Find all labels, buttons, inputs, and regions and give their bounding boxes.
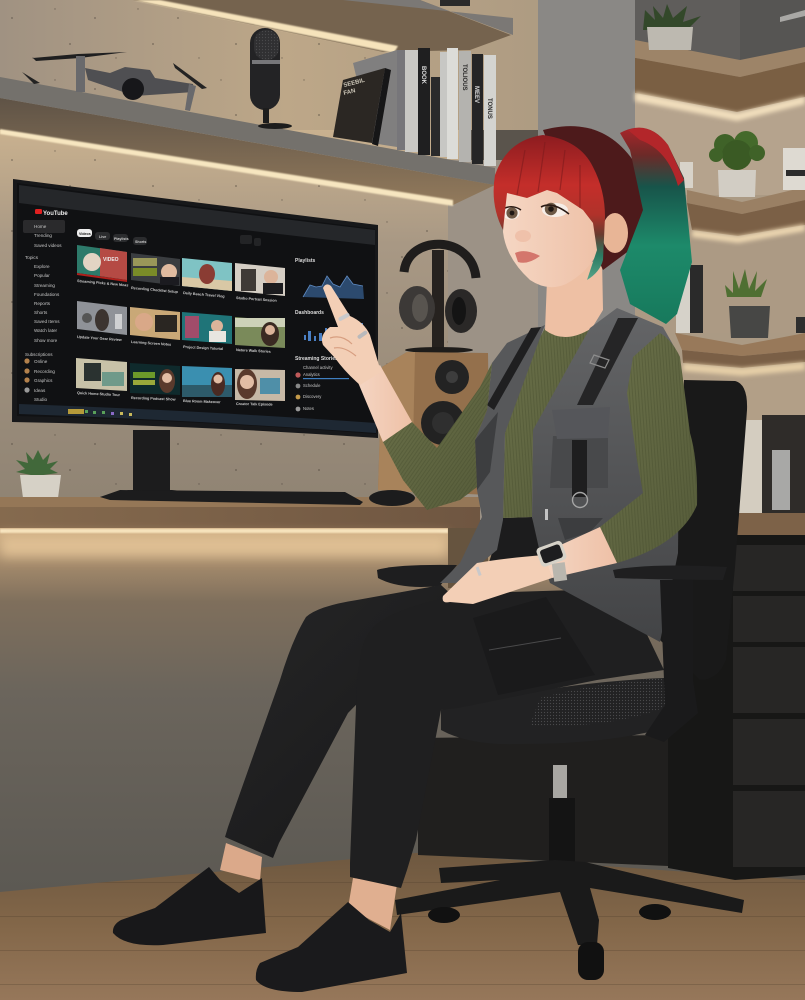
under-desk drawer unit: [418, 735, 670, 866]
wooden speaker: [378, 352, 490, 495]
ear: [602, 213, 628, 253]
shelf items behind chair: [737, 415, 805, 513]
vest: [440, 308, 680, 642]
main wall shelf: [0, 77, 495, 206]
sidebar menu: Saved Items: [34, 319, 60, 324]
sidebar menu: Explore: [34, 264, 50, 269]
chest pocket left: [475, 412, 498, 490]
vest right panel: [532, 308, 680, 642]
lower vest pocket: [558, 518, 603, 540]
sidebar menu: Home: [34, 224, 47, 229]
sidebar menu: Popular: [34, 273, 50, 278]
monitor stand: [100, 430, 240, 497]
dashboards bar chart: Dashboards: [295, 310, 324, 316]
near shoe: [256, 902, 407, 992]
torso sweater: [503, 326, 592, 518]
sidebar menu: Graphics: [34, 378, 53, 383]
ponytail: [620, 128, 692, 324]
video titles: Recording Podcast Show: [131, 396, 176, 402]
video titles: Daily Beach Travel Vlog: [183, 291, 225, 299]
sidebar menu: Studio: [34, 397, 47, 402]
far leg: [225, 585, 500, 858]
far shoe: [113, 867, 266, 945]
video titles: Learning Screen Notes: [131, 340, 171, 347]
desk: [0, 497, 805, 535]
sidebar menu: Subscriptions: [25, 352, 53, 357]
sidebar menu: Trending: [34, 233, 52, 238]
sidebar menu: Watch later: [34, 328, 58, 333]
filter chips: [77, 229, 261, 246]
sidebar menu: [23, 220, 65, 402]
streaming list: Schedule: [303, 383, 321, 388]
back wall: concrete pillar: [448, 0, 635, 520]
streaming list: Streaming Stories: [295, 356, 338, 362]
browser chrome: [19, 185, 375, 245]
books on main shelf: BOOK: [420, 66, 426, 85]
neck: [545, 258, 603, 337]
drone: [22, 52, 207, 111]
back wall: right alcove: [635, 0, 805, 520]
monitor screen: [17, 183, 376, 434]
sidebar menu: Show more: [34, 338, 58, 343]
left sleeve: [383, 363, 492, 510]
chair: [395, 380, 747, 980]
video titles: Quick Home Studio Tour: [77, 391, 121, 397]
back hair: [543, 126, 645, 270]
character: [113, 126, 697, 992]
nose: [515, 230, 531, 242]
filter chips: Live: [99, 235, 106, 239]
streaming list: [295, 356, 349, 411]
far armrest: [377, 565, 457, 587]
zipper pull: [545, 509, 548, 520]
playlists area chart: [295, 258, 364, 299]
books on main shelf: [333, 48, 496, 166]
youtube logo: YouTube: [43, 211, 68, 217]
chair base: [395, 765, 744, 980]
forearm on lap: [543, 527, 617, 578]
monitor bezel: [12, 179, 378, 438]
playlists area chart: Playlists: [295, 258, 316, 264]
ring: [476, 567, 482, 576]
taskbar: [19, 404, 376, 433]
right eye: [541, 203, 569, 217]
video titles: Streaming Picks & New Ideas: [77, 279, 129, 287]
video titles: Nature Walk Stories: [236, 348, 271, 354]
books on main shelf: MEEV: [473, 86, 479, 103]
cargo pocket: [473, 597, 595, 695]
right sleeve: [600, 333, 697, 563]
face: [503, 190, 604, 287]
floor: [0, 853, 805, 1000]
sidebar menu: Reports: [34, 301, 51, 306]
hand on lap: [443, 555, 552, 604]
streaming list: Analytics: [303, 372, 320, 377]
smartwatch: [535, 540, 568, 582]
strap buckle: [590, 355, 609, 368]
near armrest: [613, 566, 727, 742]
books on main shelf: FAN: [343, 88, 356, 97]
streaming list: Channel activity: [303, 365, 333, 370]
sidebar menu: Recording: [34, 369, 55, 374]
video thumbnails row 2: [77, 301, 285, 348]
lips: [515, 251, 540, 263]
near leg: [350, 590, 664, 888]
fringe and side lock: [494, 135, 605, 280]
chest pocket right: [550, 407, 610, 508]
right alcove plants: [643, 4, 770, 338]
waistband: [485, 517, 545, 575]
video titles: Update Your Gear Review: [77, 335, 122, 342]
video titles: Studio Portrait Session: [236, 296, 278, 303]
filter chips: Shorts: [135, 240, 146, 244]
sidebar menu: Foundations: [34, 292, 60, 297]
keyboard and mouse: [100, 490, 415, 506]
fringe strands: [517, 142, 580, 208]
sidebar menu: Streaming: [34, 283, 55, 288]
chair back: [660, 380, 747, 680]
chair seat: [441, 678, 690, 744]
back wall: upper concrete: [0, 0, 635, 510]
headphones on stand: [399, 244, 477, 353]
sidebar menu: Saved videos: [34, 243, 62, 248]
books on main shelf: SEEBIL: [343, 78, 366, 89]
video titles: Blue Room Makeover: [183, 399, 221, 404]
streaming list: Discovery: [303, 394, 322, 399]
top shelf upper: [133, 0, 513, 53]
pointing hand: [322, 284, 381, 385]
video titles: Recording Checklist Setup: [131, 286, 179, 294]
video thumbnails row 1: [77, 245, 285, 296]
sidebar menu: Topics: [25, 255, 39, 260]
books on main shelf: TONUS: [486, 98, 492, 119]
video thumbnails row 1: VIDEO: [103, 257, 119, 263]
filter chips: Videos: [79, 232, 91, 236]
video thumbnails row 3: [76, 358, 285, 401]
video titles: Creator Talk Episode: [236, 402, 273, 407]
video titles: [77, 279, 278, 407]
sidebar menu: Shorts: [34, 310, 48, 315]
under-desk LED glow: [0, 528, 488, 588]
streaming list: Notes: [303, 406, 314, 411]
desk plant: [16, 450, 61, 498]
vest straps: [487, 327, 541, 410]
vest left panel: [440, 325, 545, 583]
books on main shelf: TOLIOUS: [461, 64, 467, 91]
right alcove shelves: [635, 40, 805, 376]
sidebar menu: Ideas: [34, 388, 46, 393]
wall below desk: [0, 528, 680, 893]
far ankle: [220, 843, 262, 880]
youtube logo: [35, 209, 68, 217]
filter chips: Playlists: [114, 237, 129, 241]
video titles: Project Design Tutorial: [183, 345, 223, 351]
sidebar menu: Online: [34, 359, 48, 364]
near ankle: [348, 878, 397, 930]
dashboards bar chart: [295, 310, 363, 341]
filing cabinet: [668, 535, 805, 880]
left eye: [502, 206, 521, 220]
raised forearm: [357, 365, 412, 442]
microphone: [250, 28, 292, 129]
